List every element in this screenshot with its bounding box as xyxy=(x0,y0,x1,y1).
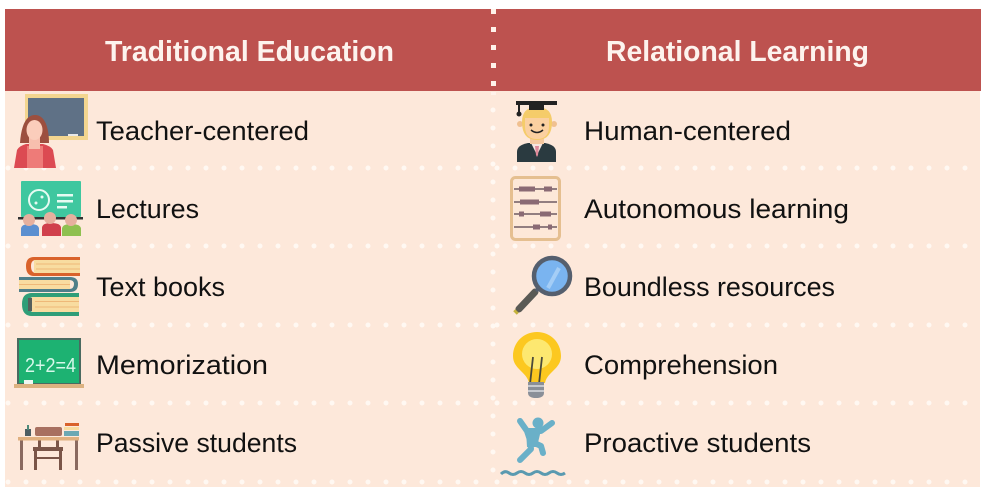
icon: stack of books xyxy=(19,257,80,316)
panel: table body xyxy=(5,91,980,487)
text: Lectures: Lectures xyxy=(96,194,199,224)
text: Proactive students: Proactive students xyxy=(584,428,811,458)
icon: graduate xyxy=(516,101,557,162)
icon: magnifying glass xyxy=(515,258,570,313)
text: Comprehension: Comprehension xyxy=(584,350,778,380)
text: Human-centered: Human-centered xyxy=(584,116,791,146)
text: Autonomous learning: Autonomous learning xyxy=(584,194,849,224)
text: Text books: Text books xyxy=(96,272,225,302)
text: Boundless resources: Boundless resources xyxy=(584,272,835,302)
heading: Relational Learning: Relational Learning xyxy=(606,36,869,68)
panel: header band xyxy=(5,9,981,91)
text: Teacher-centered: Teacher-centered xyxy=(96,116,309,146)
icon: chalkboard 2+2=4: 2+2=4 xyxy=(25,355,76,377)
heading: Traditional Education: Traditional Education xyxy=(105,36,394,68)
icon: teacher at blackboard xyxy=(14,94,88,168)
icon: jumping figure over water xyxy=(501,418,565,474)
icon: chalkboard 2+2=4 xyxy=(14,338,84,388)
icon: light bulb xyxy=(513,332,561,398)
icon: abacus xyxy=(512,178,560,240)
icon: lecture classroom xyxy=(18,181,83,236)
text: Memorization: Memorization xyxy=(96,350,268,380)
icon: school desk xyxy=(18,423,79,470)
text: Passive students: Passive students xyxy=(96,428,297,458)
